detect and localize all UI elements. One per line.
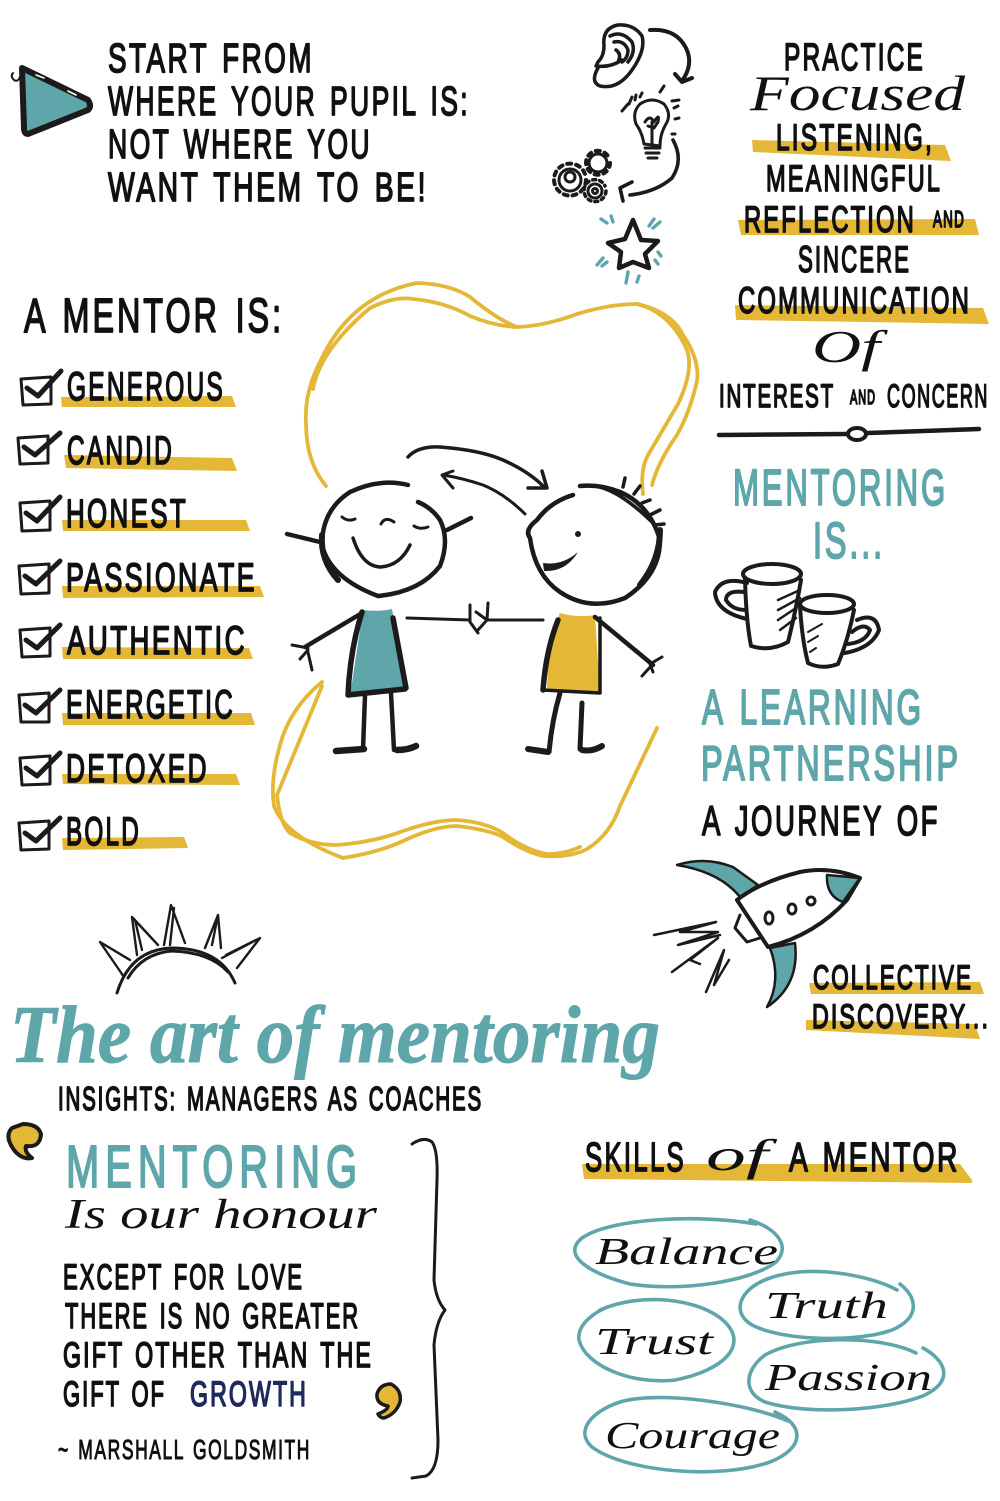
item: generous — [21, 365, 236, 409]
skill: passion — [749, 1340, 944, 1410]
figure: right mentor — [476, 478, 664, 752]
quote block — [58, 1134, 378, 1465]
text block: practice focused listening — [719, 37, 989, 414]
title: The art of mentoring — [10, 989, 660, 1080]
quote block: THERE IS NO GREATER — [65, 1297, 360, 1336]
text block: practice focused listening: PRACTICE — [784, 37, 925, 79]
skill: balance — [575, 1219, 782, 1287]
text block: practice focused listening: AND — [850, 387, 876, 409]
arrow: bulb to gears — [620, 140, 678, 201]
heading: mentoring is — [733, 459, 948, 569]
icon: teal play triangle — [12, 68, 90, 134]
script word: focused: Focused — [749, 65, 966, 121]
central mentors illustration — [273, 283, 697, 858]
highlight: reflection — [738, 219, 979, 235]
item: energetic — [19, 683, 255, 727]
quote block: GIFT OF — [63, 1375, 166, 1414]
divider with oval knot — [719, 428, 979, 440]
quote block: EXCEPT FOR LOVE — [63, 1258, 304, 1297]
highlight: listening — [752, 140, 951, 161]
item: honest: HONEST — [66, 492, 188, 536]
skill: truth — [740, 1272, 913, 1338]
icon: two cups — [715, 564, 879, 667]
icon: ear — [594, 25, 643, 87]
decorative frame: top — [306, 283, 697, 494]
text block: start from where your pupil is — [108, 35, 470, 210]
item: energetic: ENERGETIC — [66, 683, 235, 727]
arrow: ear to bulb — [650, 30, 692, 82]
text block: collective discovery — [806, 959, 990, 1039]
script word: of: Of — [812, 321, 889, 372]
item: authentic: AUTHENTIC — [67, 619, 247, 663]
icon: light bulb — [622, 86, 679, 158]
heading: skills of a mentor — [582, 1131, 972, 1183]
text block: start from where your pupil is: WHERE YOUR PUPIL IS: — [108, 78, 470, 124]
checklist of mentor qualities — [18, 365, 264, 854]
icon: rising sun — [100, 905, 260, 993]
quote block: GROWTH — [190, 1375, 308, 1414]
item: generous: GENEROUS — [67, 365, 225, 409]
item: passionate — [19, 556, 264, 600]
item: passionate: PASSIONATE — [66, 556, 257, 600]
icon: closing quote mark — [377, 1384, 400, 1418]
skill: courage — [585, 1398, 797, 1472]
quote block: ~ MARSHALL GOLDSMITH — [58, 1434, 311, 1465]
skill: truth: Truth — [765, 1285, 888, 1327]
quote block: MENTORING — [66, 1134, 363, 1200]
skill: passion: Passion — [764, 1357, 932, 1399]
heading: mentoring is: IS... — [813, 512, 885, 569]
icon: rocket — [654, 861, 860, 1007]
subtitle: INSIGHTS: MANAGERS AS COACHES — [58, 1080, 483, 1117]
icon: star with teal sparks — [597, 216, 661, 283]
text block: practice focused listening: SINCERE — [798, 239, 911, 280]
decorative frame: bottom — [273, 682, 657, 858]
item: detoxed — [20, 747, 240, 791]
figure: left mentor — [287, 483, 478, 751]
icon: gears — [554, 151, 610, 202]
skill: balance: Balance — [595, 1231, 778, 1273]
arrow: exchange right to left — [442, 471, 525, 514]
text block: start from where your pupil is: WANT THEM TO BE! — [108, 164, 428, 210]
text block: practice focused listening: INTEREST — [719, 378, 835, 414]
text block: start from where your pupil is: START FROM — [108, 35, 314, 81]
script line: is our honour: Is our honour — [64, 1192, 378, 1238]
item: candid: CANDID — [67, 429, 174, 473]
heading: skills of a mentor: of — [706, 1131, 778, 1180]
arrow: exchange left to right — [408, 447, 547, 488]
text block: practice focused listening: AND — [933, 206, 965, 232]
icon: opening quote mark — [8, 1124, 41, 1158]
item: bold: BOLD — [66, 810, 141, 854]
skill: trust — [579, 1300, 734, 1381]
brace — [412, 1139, 445, 1478]
heading: a mentor is: A MENTOR IS: — [24, 290, 284, 343]
item: authentic — [20, 619, 253, 663]
text block: a learning partnership — [701, 681, 961, 844]
heading: skills of a mentor: SKILLS — [585, 1134, 686, 1180]
highlight: communication — [735, 305, 989, 324]
quote block: GIFT OTHER THAN THE — [63, 1336, 373, 1375]
skill: trust: Trust — [595, 1321, 715, 1363]
text block: start from where your pupil is: NOT WHERE YOU — [108, 121, 372, 167]
item: detoxed: DETOXED — [66, 747, 209, 791]
skill: courage: Courage — [605, 1415, 780, 1457]
